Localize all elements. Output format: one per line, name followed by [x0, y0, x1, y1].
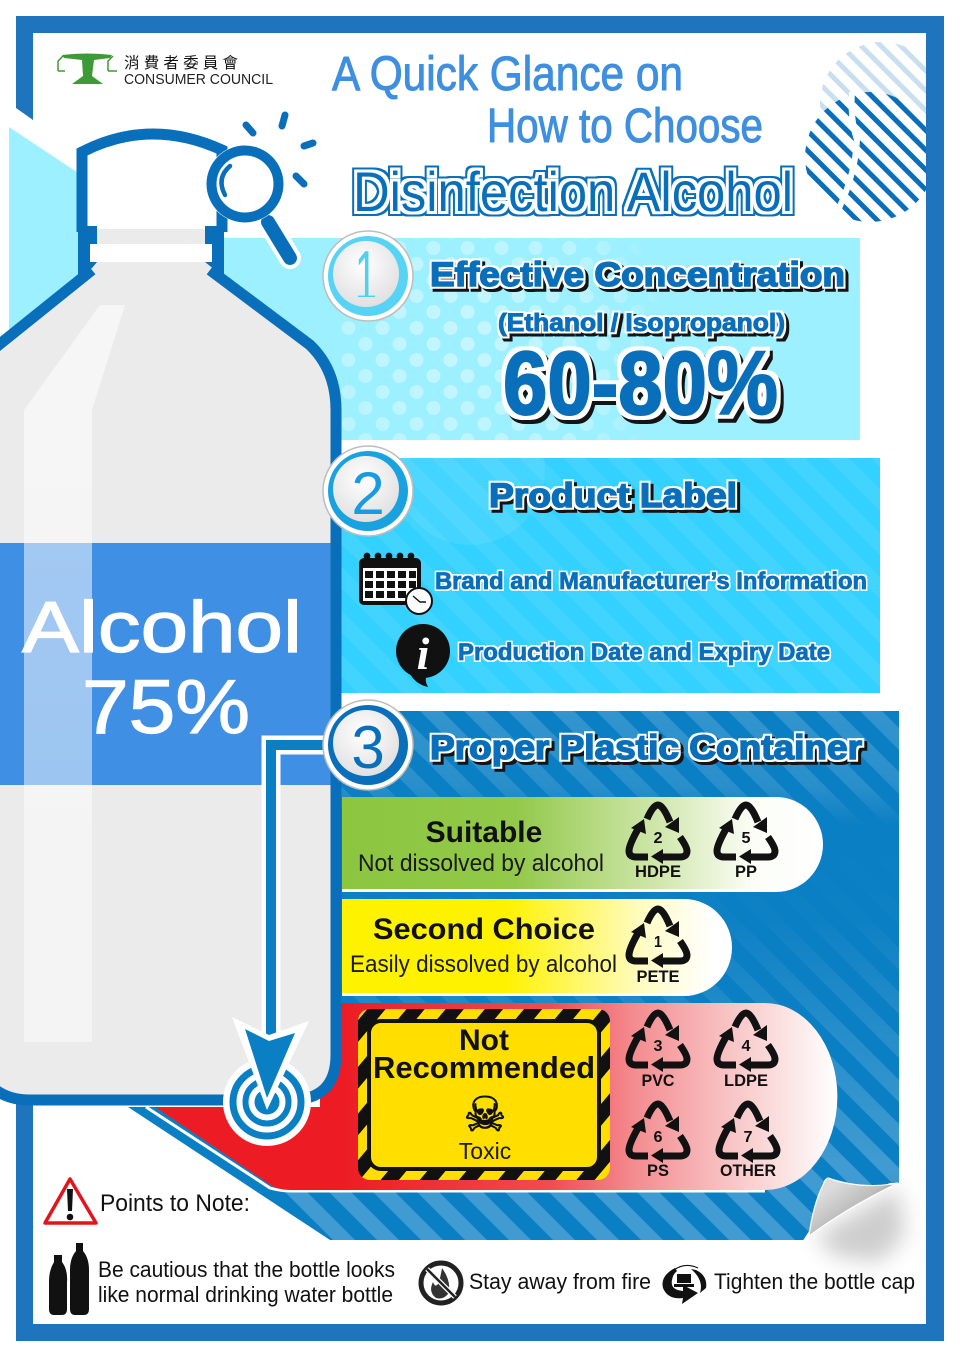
heading: effective concentration: Effective Concentration [430, 256, 845, 294]
number badge 2: 2 [351, 460, 385, 527]
warning box with hazard stripes [358, 1009, 610, 1180]
text: stay away from fire: Stay away from fire [469, 1269, 651, 1294]
bottle label band [0, 543, 331, 785]
row: not recommended [146, 1003, 837, 1191]
icon: recycle 1 PETE: PETE [636, 967, 680, 986]
figure: 60-80%: 60-80% [503, 334, 778, 434]
heading: points to note: Points to Note: [100, 1190, 250, 1217]
warning box with hazard stripes: Toxic [459, 1138, 511, 1164]
bottle illustration: 75% [82, 665, 250, 750]
icon: recycle 4 LDPE: 4 [742, 1038, 751, 1055]
title: Disinfection Alcohol: Disinfection Alcohol [353, 160, 793, 223]
number badge 3 [323, 700, 413, 790]
target rings with arrowhead [223, 1017, 311, 1146]
number badge 1: 1 [355, 237, 377, 317]
bottle body [0, 262, 336, 1100]
icon: magnifying glass [206, 115, 313, 258]
title: How to Choose [487, 100, 763, 153]
icon: recycle 2 HDPE [629, 805, 687, 881]
page curl at panel corner [800, 1178, 905, 1262]
panel 1: effective concentration [340, 238, 860, 440]
heading: product label: Product Label [489, 477, 737, 515]
icon: tighten cap [662, 1265, 706, 1304]
row: suitable: Not dissolved by alcohol [358, 850, 604, 877]
row: second choice: Easily dissolved by alcohol [350, 951, 617, 978]
arrow from step 3 to target [271, 745, 330, 1040]
logo: Consumer Council: 消費者委員會 [124, 54, 242, 72]
bottle highlight [24, 305, 125, 1042]
icon: two drinking bottles [49, 1243, 89, 1315]
icon: recycle 5 PP: PP [735, 862, 757, 881]
icon: recycle 4 LDPE: LDPE [724, 1071, 768, 1090]
icon: recycle 3 PVC: PVC [642, 1071, 674, 1090]
icon: recycle 7 OTHER: 7 [744, 1129, 753, 1146]
icon: warning triangle [45, 1179, 96, 1223]
icon: recycle 3 PVC [629, 1013, 687, 1090]
icon: recycle 3 PVC: 3 [654, 1038, 663, 1055]
number badge 2 [323, 446, 413, 536]
text: production date and expiry date: Production Date and Expiry Date [458, 639, 830, 666]
warning box with hazard stripes: Recommended [373, 1050, 595, 1085]
title [332, 48, 763, 153]
subheading: ethanol / isopropanol: (Ethanol / Isopropanol) [498, 309, 785, 337]
icon: recycle 6 PS [629, 1104, 687, 1180]
icon: recycle 5 PP [717, 805, 775, 881]
row: second choice: Second Choice [373, 913, 595, 946]
panel 3: proper plastic container [100, 711, 900, 1241]
number badge 3: 3 [351, 714, 385, 781]
title: A Quick Glance on [332, 48, 683, 101]
number badge 1 [323, 231, 413, 321]
text: brand and manufacturer's information: Brand and Manufacturer’s Information [435, 568, 867, 595]
bottle outline [0, 270, 336, 1100]
icon: recycle 6 PS: PS [647, 1161, 669, 1180]
icon: recycle 1 PETE [629, 909, 687, 986]
bottle cap [82, 134, 222, 232]
row: suitable [342, 797, 823, 892]
label text: alcohol 75%: Alcohol [22, 588, 302, 668]
text: bottle caution [98, 1257, 395, 1307]
decorative striped circles [805, 42, 926, 222]
heading: proper plastic container: Proper Plastic Container [430, 729, 862, 767]
icon: no fire [421, 1263, 461, 1303]
row: second choice [342, 899, 732, 996]
panel: light blue backdrop behind bottle [9, 127, 340, 440]
icon: recycle 4 LDPE [717, 1013, 775, 1090]
icon: recycle 1 PETE: 1 [654, 934, 662, 951]
bottle illustration [0, 134, 336, 1100]
text: bottle caution: like normal drinking water bottle [98, 1282, 393, 1307]
icon: recycle 7 OTHER: OTHER [720, 1161, 776, 1180]
logo: Consumer Council [58, 54, 273, 88]
text: tighten the bottle cap: Tighten the bottle cap [714, 1269, 915, 1294]
text: bottle caution: Be cautious that the bottle looks [98, 1257, 395, 1282]
panel 2: product label [342, 458, 880, 693]
row: suitable: Suitable [426, 816, 542, 849]
icon: recycle 7 OTHER [719, 1104, 777, 1180]
icon: recycle 5 PP: 5 [742, 830, 751, 847]
icon: information bubble: i [417, 628, 430, 679]
warning box with hazard stripes: Not [459, 1024, 509, 1057]
icon: skull and crossbones: ☠ [463, 1087, 507, 1143]
logo: Consumer Council: CONSUMER COUNCIL [124, 72, 273, 88]
icon: calendar with clock [359, 553, 432, 614]
icon: recycle 2 HDPE: HDPE [635, 862, 681, 881]
icon: information bubble [396, 624, 450, 687]
bottle neck [78, 226, 224, 276]
icon: recycle 6 PS: 6 [654, 1129, 663, 1146]
icon: recycle 2 HDPE: 2 [654, 830, 663, 847]
